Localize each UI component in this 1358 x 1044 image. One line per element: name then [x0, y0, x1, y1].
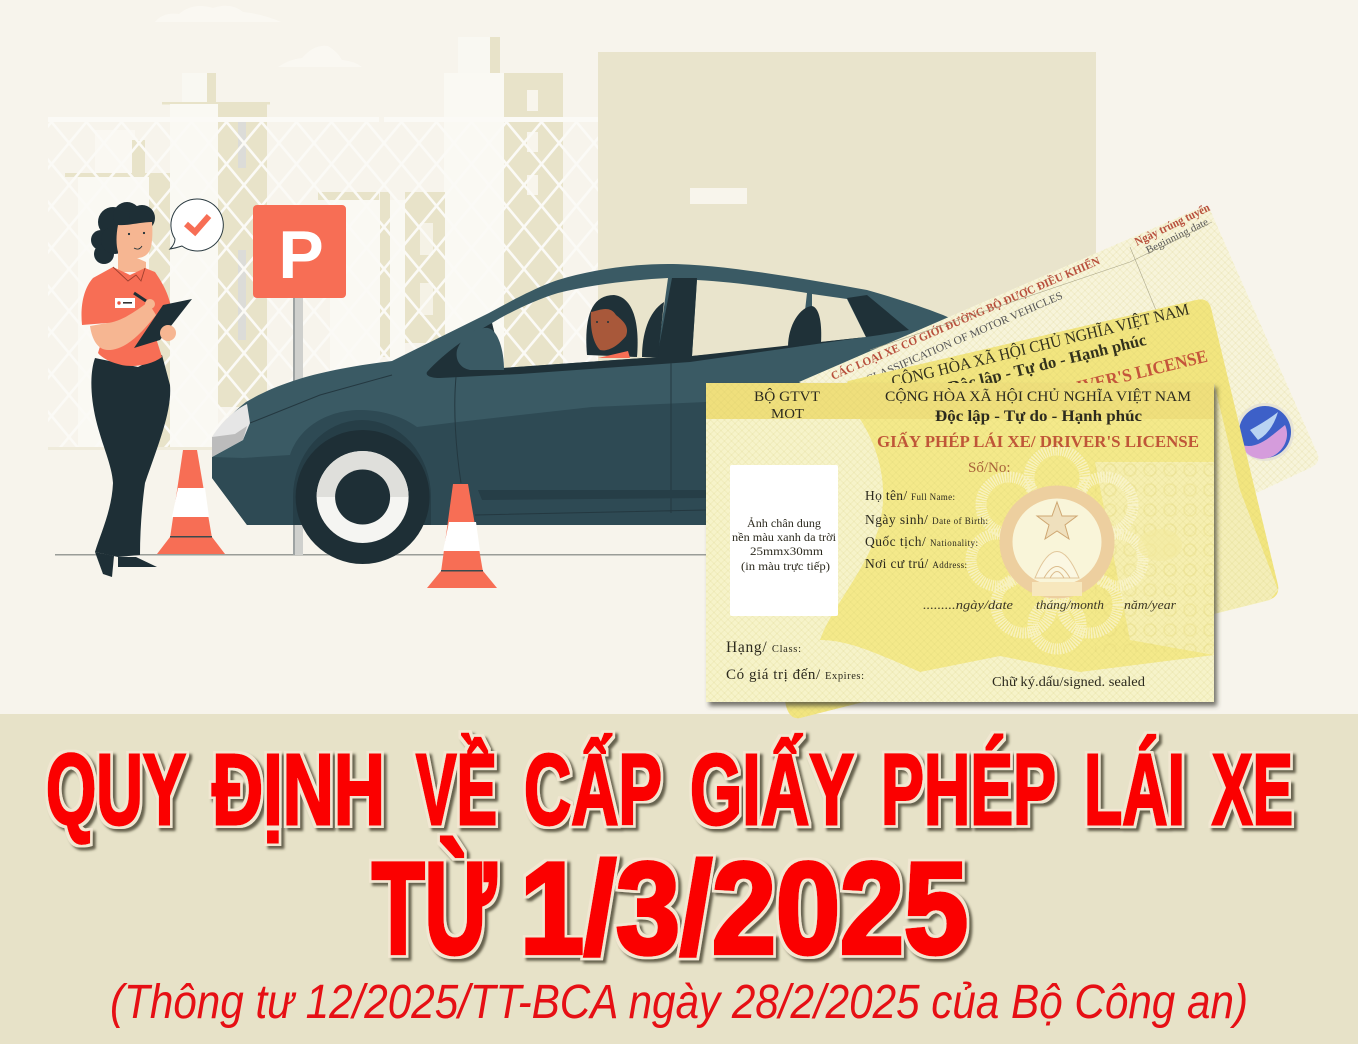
national emblem watermark — [971, 450, 1182, 649]
personal information fields: Quốc tịch/ Nationality: — [865, 534, 978, 549]
traffic cone right — [427, 484, 497, 588]
back card heading: CÁC LOẠI XE CƠ GIỚI ĐƯỜNG BỘ ĐƯỢC ĐIỀU KHIỂN — [828, 252, 1103, 383]
background scene: clouds and buildings — [48, 6, 1096, 452]
personal information fields: Ngày sinh/ Date of Birth: — [865, 512, 988, 527]
middle card republic line: CỘNG HÒA XÃ HỘI CHỦ NGHĨA VIỆT NAM — [889, 299, 1191, 391]
front wheel — [293, 420, 431, 564]
title line 1: CẤP — [524, 733, 662, 846]
speech bubble with check mark — [170, 199, 223, 251]
issue date: tháng/month — [1036, 598, 1104, 612]
issue date — [923, 598, 1176, 612]
back card column sublabel: Beginning date — [1144, 216, 1211, 257]
photo placeholder: 25mmx30mm — [750, 544, 824, 558]
driver — [586, 295, 638, 358]
car — [212, 264, 1010, 525]
photo placeholder: Ảnh chân dung — [747, 516, 821, 530]
hologram seal — [1236, 403, 1294, 461]
photo placeholder: nền màu xanh da trời — [732, 530, 837, 544]
class and expiry: Có giá trị đến/ Expires: — [726, 667, 864, 683]
ministry header: MOT — [771, 407, 804, 422]
woman inspector with clipboard — [81, 202, 192, 577]
middle card license title: DRIVER'S LICENSE — [1051, 346, 1209, 403]
issue date: năm/year — [1124, 598, 1176, 612]
middle card motto: Độc lập - Tự do - Hạnh phúc — [946, 330, 1148, 397]
license number: Số/No: — [968, 460, 1011, 476]
title line 1: PHÉP — [881, 734, 1056, 846]
photo placeholder — [730, 465, 838, 616]
class and expiry: Hạng/ Class: — [726, 639, 801, 656]
back card column label: Ngày trúng tuyển — [1132, 200, 1212, 249]
traffic cone left — [157, 450, 225, 554]
title line 1: XE — [1212, 734, 1293, 846]
personal information fields — [865, 488, 988, 571]
front seat — [642, 302, 664, 357]
issue date: .........ngày/date — [923, 598, 1014, 612]
title line 1: LÁI — [1084, 734, 1185, 846]
background: illustration area — [0, 0, 1358, 714]
license card: middle — [760, 299, 1278, 718]
title line 1: ĐỊNH — [212, 734, 385, 846]
chain-link fence — [48, 117, 598, 447]
motto: Độc lập - Tự do - Hạnh phúc — [935, 408, 1142, 425]
ground line — [55, 554, 710, 556]
back card subheading: CLASSIFICATION OF MOTOR VEHICLES — [864, 290, 1065, 386]
title line 1: VỀ — [416, 734, 497, 846]
class and expiry — [726, 639, 864, 683]
parking sign — [253, 205, 346, 555]
ministry header: BỘ GTVT — [754, 388, 820, 405]
republic line: CỘNG HÒA XÃ HỘI CHỦ NGHĨA VIỆT NAM — [885, 388, 1191, 405]
ministry header — [754, 388, 820, 422]
signature line: Chữ ký.dấu/signed. sealed — [992, 674, 1145, 689]
personal information fields: Họ tên/ Full Name: — [865, 488, 955, 503]
title line 1: QUY — [46, 734, 186, 846]
rear seat — [788, 306, 821, 347]
title line 1 — [46, 733, 1293, 846]
background: title band — [0, 714, 1358, 1044]
title line 2 — [372, 835, 968, 981]
title line 2: 1/3/2025 — [520, 835, 968, 981]
photo placeholder: (in màu trực tiếp) — [741, 559, 830, 573]
license card: front — [706, 383, 1214, 702]
personal information fields: Nơi cư trú/ Address: — [865, 556, 967, 571]
license heading: GIẤY PHÉP LÁI XE/ DRIVER'S LICENSE — [877, 432, 1199, 451]
title line 2: TỪ — [372, 835, 496, 981]
title line 1: GIẤY — [690, 733, 854, 846]
parking sign: P — [278, 217, 324, 293]
license card: back side — [799, 200, 1318, 510]
